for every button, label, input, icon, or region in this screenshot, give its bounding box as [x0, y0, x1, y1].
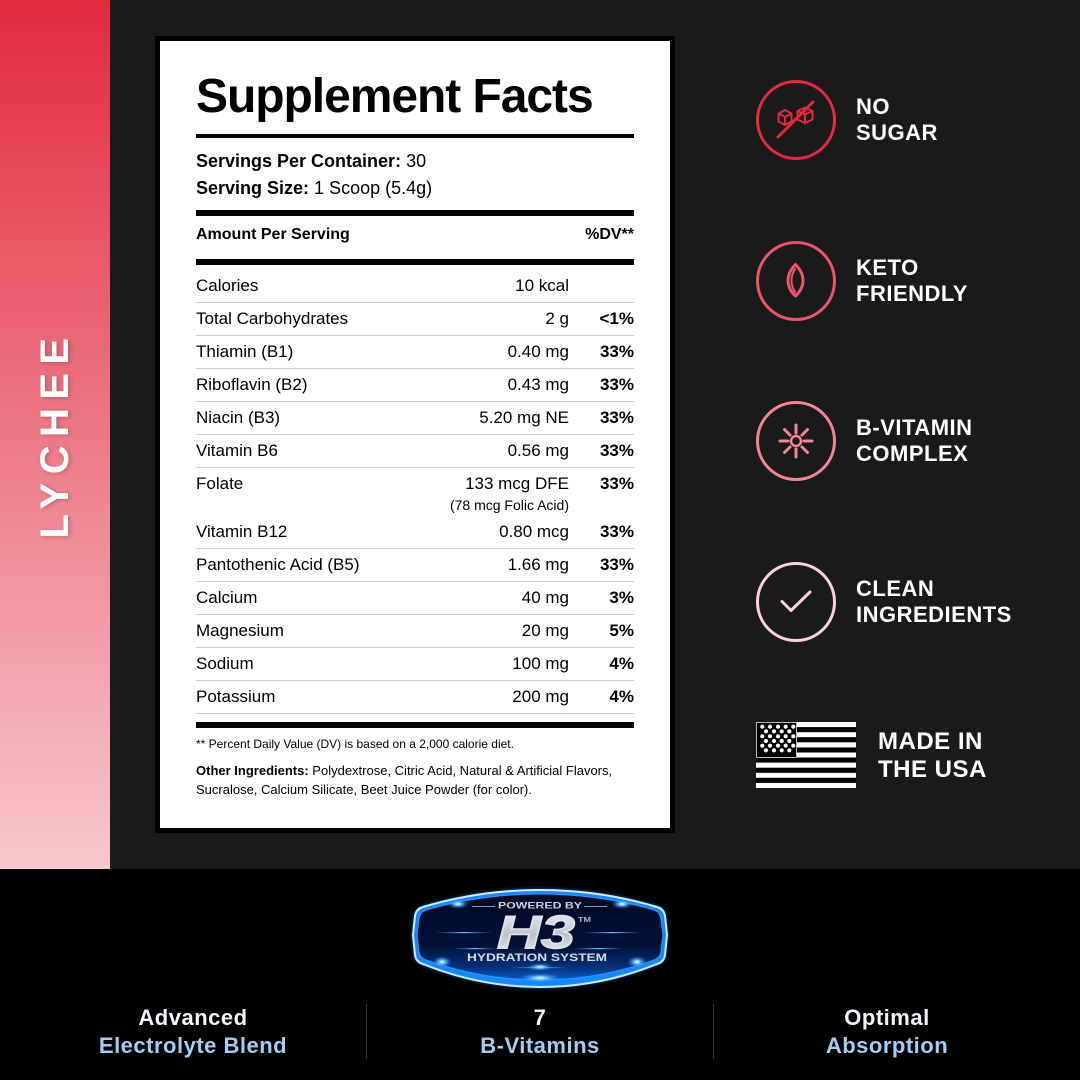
footnote: ** Percent Daily Value (DV) is based on a 2,000 calorie diet.: [196, 737, 514, 751]
nutrient table: Thiamin (B1): [196, 342, 293, 361]
nutrient table: Potassium: [196, 687, 275, 706]
icon: american flag: [756, 722, 856, 788]
nutrient table: Vitamin B12: [196, 522, 287, 541]
nutrient table: 33%: [600, 555, 634, 574]
panel: footer: [0, 869, 1080, 1080]
nutrient table: 133 mcg DFE: [465, 474, 569, 493]
feature: b-vitamin complex: [756, 401, 973, 481]
nutrient table: 33%: [600, 522, 634, 541]
stat: optimal absorption: [826, 1005, 948, 1058]
nutrient table: 10 kcal: [515, 276, 569, 295]
label: FRIENDLY: [856, 281, 968, 306]
nutrient table: 4%: [609, 654, 634, 673]
label: [856, 255, 968, 306]
logo: H3 hydration system badge: [409, 886, 671, 991]
nutrient table: 3%: [609, 588, 634, 607]
stat: 7 b-vitamins: 7: [534, 1005, 546, 1030]
nutrient table: [196, 276, 634, 714]
feature: no sugar: [756, 80, 938, 160]
nutrient table: Calcium: [196, 588, 257, 607]
stat: optimal absorption: Absorption: [826, 1033, 948, 1058]
label: B-VITAMIN: [856, 415, 973, 440]
nutrient table: 5.20 mg NE: [479, 408, 569, 427]
nutrient table: Vitamin B6: [196, 441, 278, 460]
nutrient table: Riboflavin (B2): [196, 375, 308, 394]
nutrient table: Folate: [196, 474, 243, 493]
nutrient table: 100 mg: [512, 654, 569, 673]
nutrient table: Sodium: [196, 654, 254, 673]
stat: advanced electrolyte blend: Electrolyte Blend: [99, 1033, 287, 1058]
nutrient table: <1%: [600, 309, 634, 328]
nutrient table: 2 g: [545, 309, 569, 328]
label: THE USA: [878, 756, 987, 783]
table header: [196, 226, 634, 243]
nutrient table: 33%: [600, 441, 634, 460]
label: [856, 576, 1012, 627]
label: COMPLEX: [856, 441, 968, 466]
label: CLEAN: [856, 576, 934, 601]
logo: H3 hydration system badge: POWERED BY: [498, 900, 582, 910]
logo: H3 hydration system badge: HYDRATION SYSTEM: [467, 952, 607, 964]
logo: H3 hydration system badge: H3: [497, 906, 576, 958]
nutrient table: (78 mcg Folic Acid): [450, 497, 569, 513]
stat: advanced electrolyte blend: [99, 1005, 287, 1058]
icon: crossed-out sugar cubes: [756, 80, 836, 160]
stat: optimal absorption: Optimal: [844, 1005, 930, 1030]
nutrient table: 20 mg: [522, 621, 569, 640]
stat: advanced electrolyte blend: Advanced: [138, 1005, 248, 1030]
stat: 7 b-vitamins: B-Vitamins: [480, 1033, 600, 1058]
servings per container: Servings Per Container: 30: [196, 151, 426, 171]
panel: supplement facts label: [155, 36, 675, 833]
logo: H3 hydration system badge: TM: [578, 917, 591, 924]
other ingredients: [196, 763, 612, 797]
label: [856, 415, 973, 466]
label: [878, 728, 987, 783]
label: MADE IN: [878, 728, 983, 755]
icon: vitamin sun: [756, 401, 836, 481]
nutrient table: 200 mg: [512, 687, 569, 706]
stat: 7 b-vitamins: [480, 1005, 600, 1058]
panel: flavor side band: [0, 0, 110, 869]
label: SUGAR: [856, 120, 938, 145]
table header: Amount Per Serving: [196, 226, 350, 243]
title: Supplement Facts: [196, 70, 593, 123]
nutrient table: 33%: [600, 474, 634, 493]
nutrient table: 0.40 mg: [508, 342, 569, 361]
label: INGREDIENTS: [856, 602, 1012, 627]
nutrient table: Calories: [196, 276, 258, 295]
label: KETO: [856, 255, 919, 280]
serving size: Serving Size: 1 Scoop (5.4g): [196, 178, 432, 198]
table header: %DV**: [585, 226, 634, 243]
nutrient table: 4%: [609, 687, 634, 706]
label: NO: [856, 94, 890, 119]
nutrient table: 5%: [609, 621, 634, 640]
nutrient table: 33%: [600, 375, 634, 394]
nutrient table: 0.80 mcg: [499, 522, 569, 541]
feature: made in the usa: [756, 722, 987, 788]
nutrient table: 40 mg: [522, 588, 569, 607]
nutrient table: Pantothenic Acid (B5): [196, 555, 359, 574]
nutrient table: Niacin (B3): [196, 408, 280, 427]
other ingredients: Sucralose, Calcium Silicate, Beet Juice Powder (for color).: [196, 782, 532, 797]
flavor name: LYCHEE: [33, 330, 77, 538]
other ingredients: Other Ingredients: Polydextrose, Citric Acid, Natural & Artificial Flavors,: [196, 763, 612, 778]
icon: check mark: [756, 562, 836, 642]
nutrient table: 1.66 mg: [508, 555, 569, 574]
feature: clean ingredients: [756, 562, 1012, 642]
nutrient table: 33%: [600, 408, 634, 427]
feature: keto friendly: [756, 241, 968, 321]
label: [856, 94, 938, 145]
nutrient table: Total Carbohydrates: [196, 309, 348, 328]
nutrient table: 0.56 mg: [508, 441, 569, 460]
nutrient table: Magnesium: [196, 621, 284, 640]
nutrient table: 33%: [600, 342, 634, 361]
nutrient table: 0.43 mg: [508, 375, 569, 394]
icon: keto leaf: [756, 241, 836, 321]
